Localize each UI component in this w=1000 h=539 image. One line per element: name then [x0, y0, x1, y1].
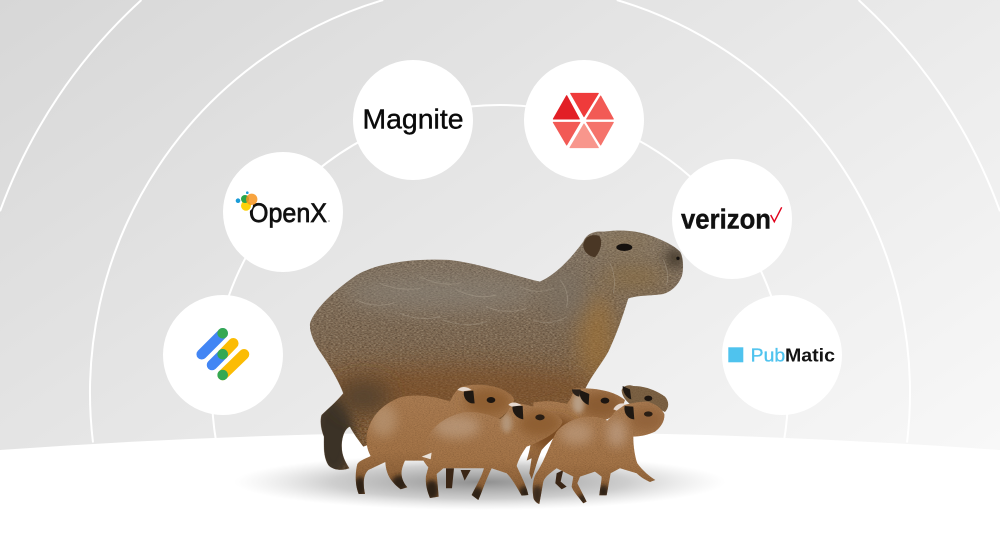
- baby: middle front: [422, 403, 562, 503]
- baby capybaras: [353, 385, 668, 504]
- logo bubble: OpenX: [223, 152, 343, 272]
- adult capybara: [310, 230, 684, 477]
- logo bubble: OpenX: OpenX: [249, 198, 327, 228]
- ear: [583, 235, 601, 257]
- logo bubble: PubMatic: Matic: [785, 345, 835, 366]
- logo bubble: PubMatic: [722, 295, 842, 415]
- baby: back right head: [622, 385, 668, 412]
- ground shadow: [234, 454, 726, 510]
- eye: [616, 244, 632, 251]
- baby: right front: [531, 402, 665, 504]
- logo bubble: Google Ad Manager: [163, 295, 283, 415]
- logo bubble: Verizon: verizon: [681, 203, 771, 234]
- white ground: [0, 432, 1000, 539]
- nostril: [676, 257, 680, 260]
- logo bubble: Magnite: [353, 60, 473, 180]
- logo bubble: Verizon: [672, 159, 792, 279]
- fur strands: [357, 260, 668, 325]
- baby: behind right: [527, 388, 625, 489]
- logo bubble: Magnite: Magnite: [362, 104, 464, 134]
- baby: left: [353, 385, 514, 497]
- logo bubble: PubMatic: Pub: [751, 345, 785, 366]
- logo bubble: red hexagon: [524, 60, 644, 180]
